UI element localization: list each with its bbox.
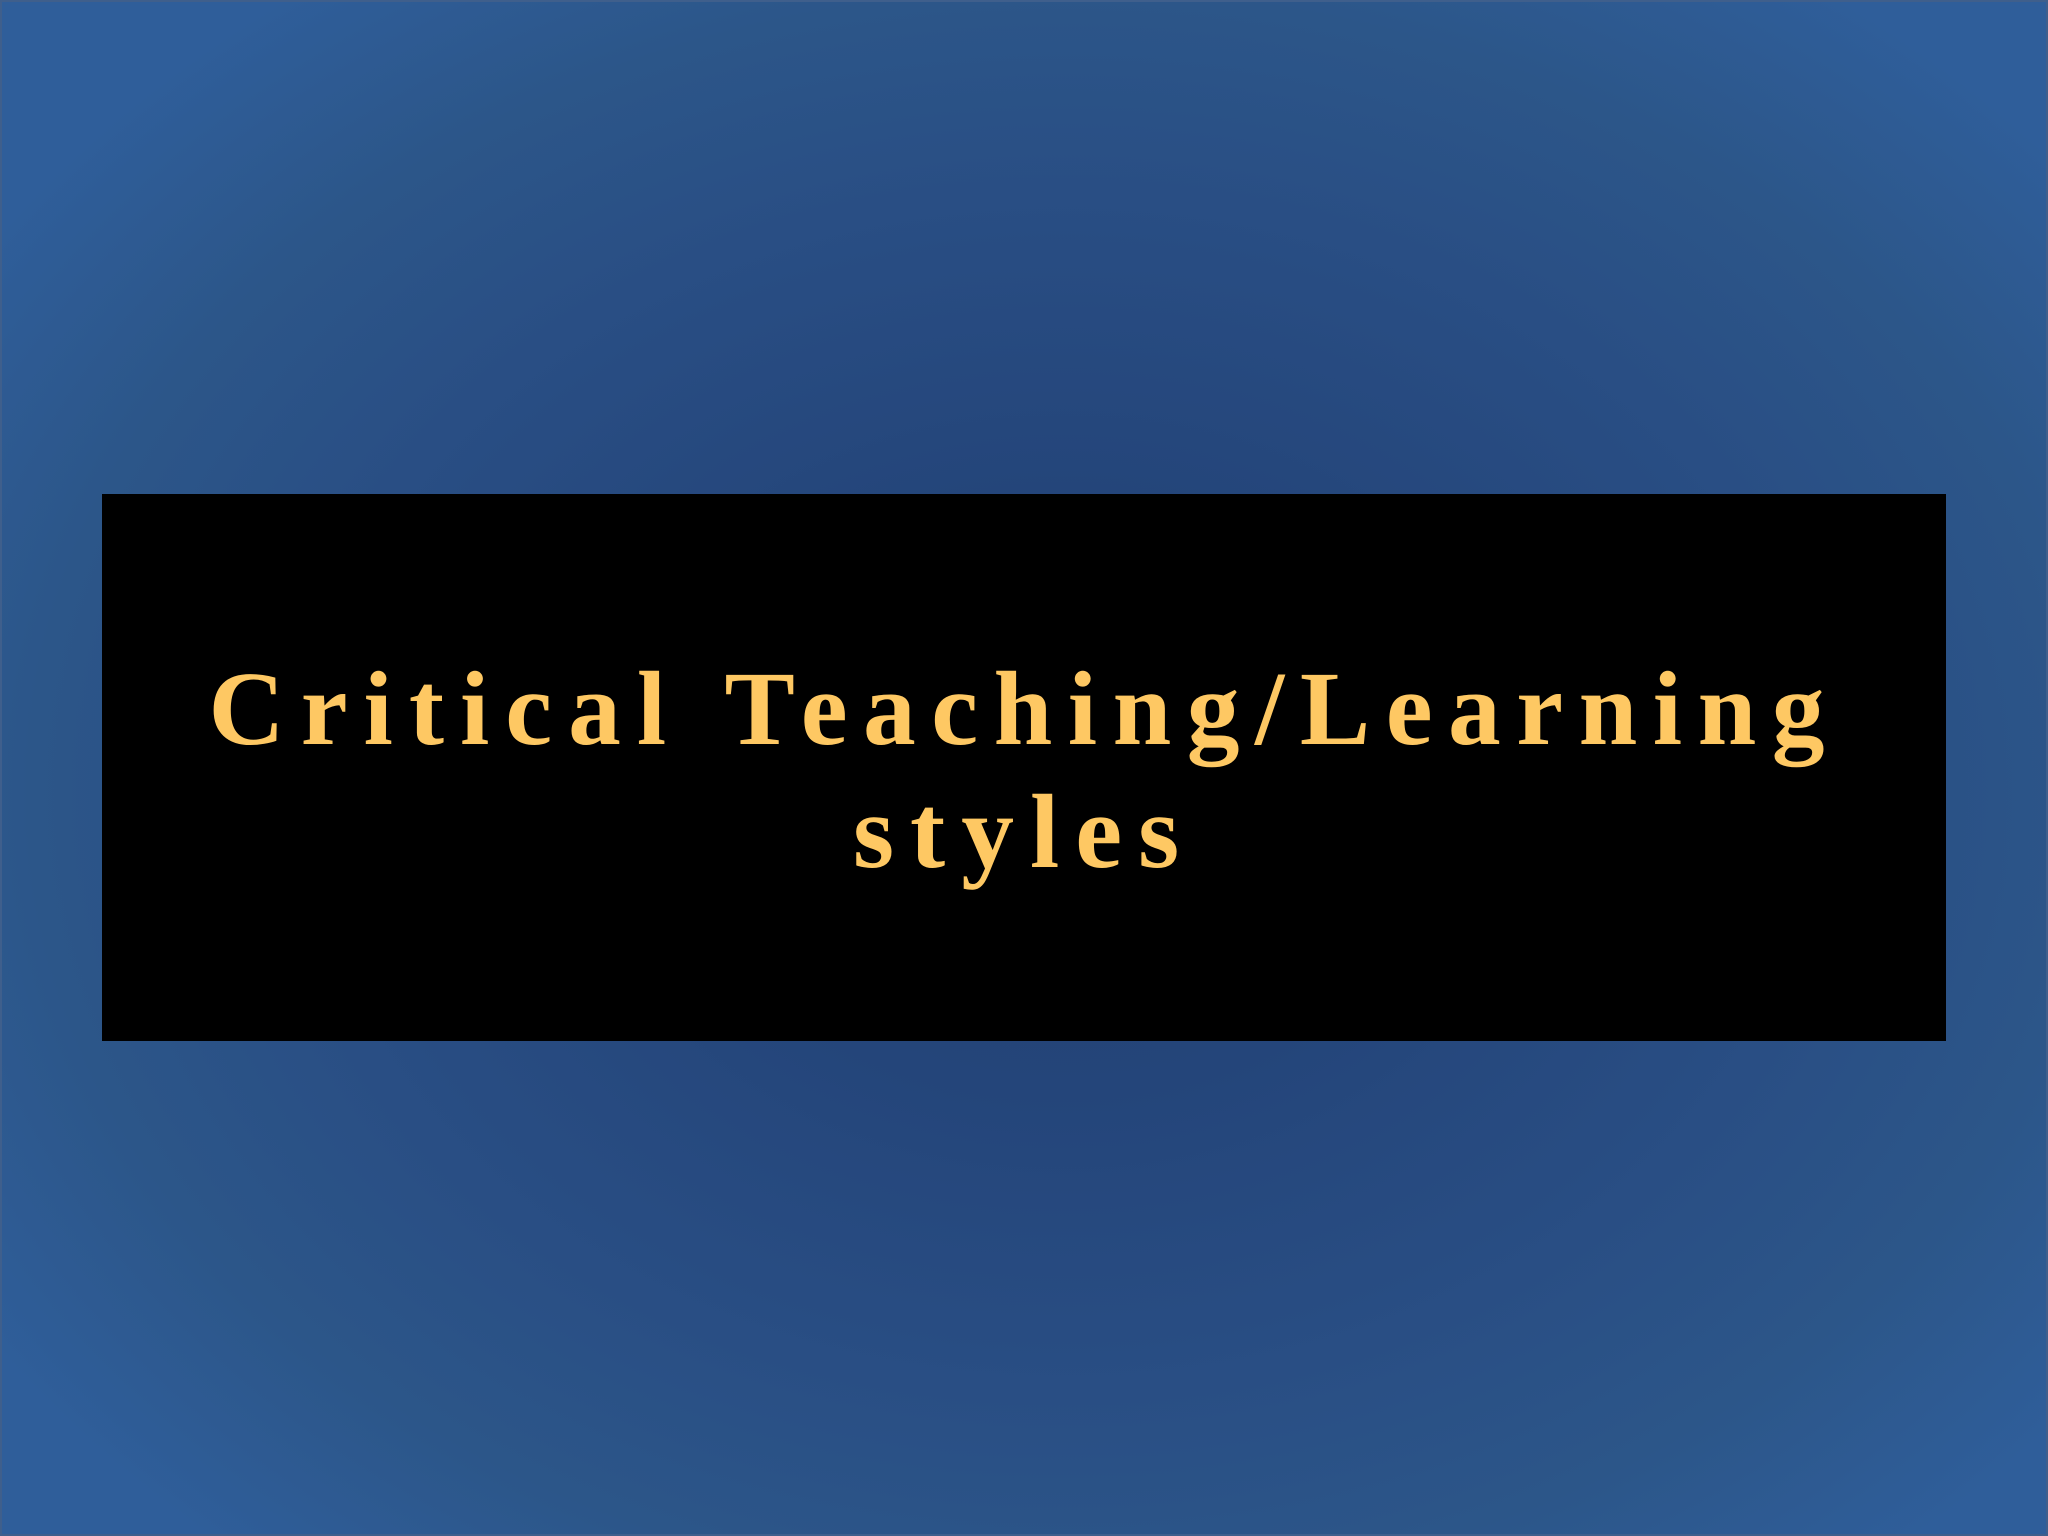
title line 1: Critical Teaching/Learning [208,650,1840,767]
title band [102,494,1946,1041]
title text [208,650,1840,890]
title line 2: styles [853,773,1195,890]
